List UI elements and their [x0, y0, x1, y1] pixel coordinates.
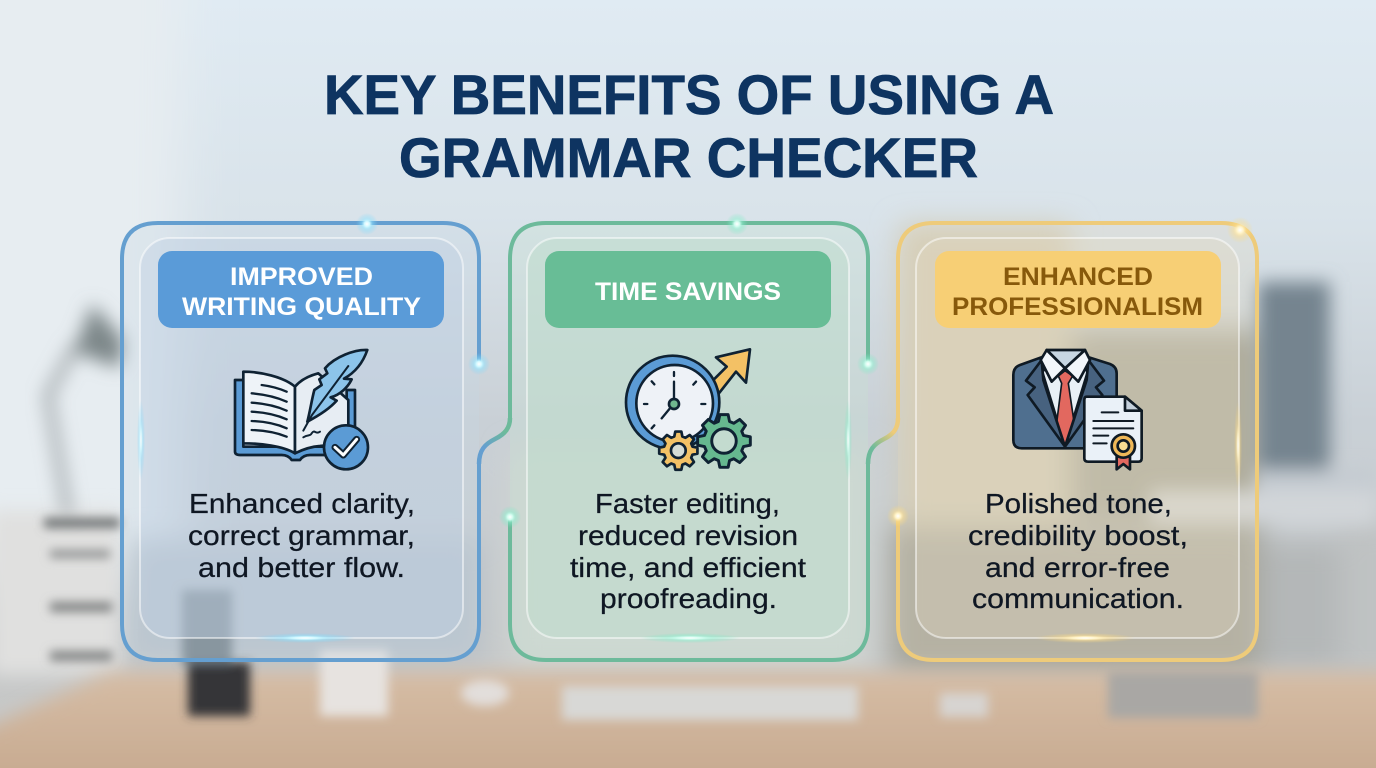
icon: business suit with certificate — [1013, 350, 1142, 469]
panel 3 description: communication. — [972, 583, 1184, 614]
panel 2 description — [570, 488, 806, 614]
panel 2 inner glass card — [527, 238, 849, 638]
title — [324, 63, 1054, 189]
connector between panels 1 and 2 — [479, 418, 510, 464]
panel 3 heading: PROFESSIONALISM — [952, 293, 1203, 321]
panel: enhanced professionalism — [868, 217, 1257, 660]
panel 3 inner glass card — [916, 238, 1239, 638]
panel 2 description: time, and efficient — [570, 552, 806, 583]
panel 2 heading: TIME SAVINGS — [595, 278, 781, 306]
panel: improved writing quality — [122, 213, 490, 660]
panel 1 heading — [158, 251, 444, 328]
panel 3 description: and error-free — [985, 552, 1170, 583]
title: GRAMMAR CHECKER — [399, 126, 978, 189]
panel 1 heading: IMPROVED — [230, 263, 373, 291]
panel 3 heading: ENHANCED — [1003, 263, 1153, 291]
panel 3 description: credibility boost, — [968, 520, 1188, 551]
panel 1 outline — [122, 223, 479, 660]
panel 3 description: Polished tone, — [985, 488, 1172, 519]
panel 1 glow accents — [137, 213, 490, 643]
panel 3 glow accents — [887, 217, 1253, 643]
panel 1 description: Enhanced clarity, — [189, 488, 415, 519]
icon: clock with arrow and gears — [626, 349, 750, 470]
panel 1 description — [188, 488, 415, 583]
panel 2 description: proofreading. — [600, 583, 777, 614]
panel 2 description: Faster editing, — [595, 488, 780, 519]
panel 3 heading — [935, 251, 1221, 328]
panel 2 glow accents — [499, 213, 879, 643]
panel 1 description: correct grammar, — [188, 520, 415, 551]
panel 2 description: reduced revision — [578, 520, 798, 551]
panel 1 description: and better flow. — [198, 552, 405, 583]
panel 2 outline — [510, 223, 868, 660]
panel: time savings — [479, 213, 879, 660]
panel 2 heading — [545, 251, 831, 328]
panel 3 outline — [898, 223, 1257, 660]
connector between panels 2 and 3 — [868, 418, 898, 464]
panel 1 heading: WRITING QUALITY — [182, 293, 421, 321]
title: KEY BENEFITS OF USING A — [324, 63, 1054, 126]
icon: open book with feather and check — [235, 350, 368, 469]
panel 1 inner glass card — [140, 238, 463, 638]
panel 3 description — [968, 488, 1188, 614]
